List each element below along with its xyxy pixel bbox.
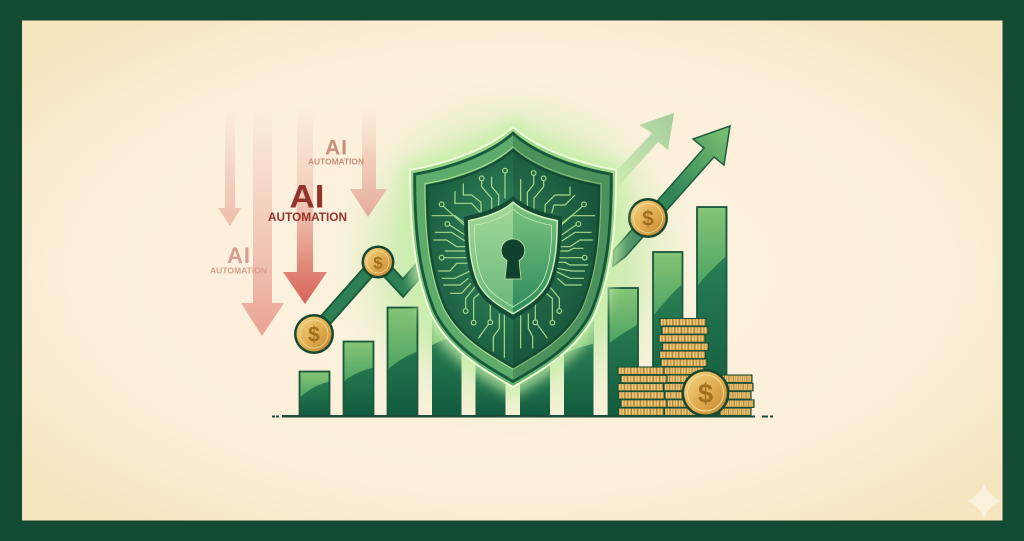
bar 3 bbox=[388, 308, 418, 416]
coin: right on arrow bbox=[628, 198, 668, 238]
arrow: right bbox=[350, 108, 387, 217]
inner shield body bbox=[469, 202, 557, 314]
circuit traces bbox=[432, 168, 595, 358]
coin stacks bbox=[618, 318, 754, 416]
shield field bbox=[427, 150, 599, 367]
shield halo bbox=[410, 127, 616, 387]
traces: left and top bbox=[432, 168, 507, 358]
coin: left low bbox=[294, 314, 334, 354]
coin: large front: $ bbox=[698, 378, 713, 408]
coin: left high bbox=[362, 246, 394, 278]
label: AI automation left bbox=[210, 243, 267, 276]
arrow: long left bbox=[241, 108, 284, 336]
bar 4 bbox=[432, 310, 462, 416]
bar 10 bbox=[697, 207, 726, 416]
inner shield right half bbox=[513, 204, 556, 312]
coin: left high: $ bbox=[373, 254, 383, 272]
shield right shade bbox=[513, 135, 610, 380]
arrow: small far left bbox=[218, 108, 241, 226]
bar 1 bbox=[300, 372, 330, 416]
bar 6 bbox=[520, 350, 550, 416]
bar 5 bbox=[476, 350, 506, 416]
bar 7 bbox=[564, 320, 594, 416]
coin: large front bbox=[682, 369, 730, 417]
label: AI automation left: AUTOMATION bbox=[210, 266, 267, 276]
main up arrow bbox=[613, 126, 730, 266]
label: AI automation top right bbox=[308, 136, 364, 166]
label: AI automation dark centre: AI bbox=[290, 178, 324, 214]
label: AI automation left: AI bbox=[227, 243, 250, 268]
inner shield line bbox=[474, 209, 552, 307]
inner shield outline bbox=[464, 196, 562, 320]
label: AI automation dark centre bbox=[268, 178, 347, 224]
traces: right and bottom bbox=[521, 171, 595, 348]
faded up arrow bbox=[617, 113, 674, 187]
stack: middle bbox=[659, 318, 708, 416]
arrow: dark centre bbox=[283, 108, 327, 304]
label: AI automation dark centre: AUTOMATION bbox=[268, 212, 347, 224]
stack: left bbox=[618, 367, 667, 416]
bar 2 bbox=[344, 342, 374, 416]
bar 9 bbox=[653, 252, 682, 416]
coin: left low: $ bbox=[308, 324, 320, 346]
trend line left bbox=[314, 261, 426, 333]
bar 8 bbox=[608, 288, 638, 416]
bar chart bbox=[300, 207, 726, 416]
keyhole bbox=[501, 239, 525, 279]
baseline bbox=[272, 415, 773, 418]
shield bbox=[410, 127, 616, 387]
label: AI automation top right: AUTOMATION bbox=[308, 156, 364, 166]
shield inner light line bbox=[425, 147, 601, 369]
shield rim bbox=[410, 127, 616, 387]
shield dark line bbox=[415, 133, 611, 382]
coin: right on arrow: $ bbox=[642, 208, 654, 230]
label: AI automation top right: AI bbox=[325, 136, 347, 160]
shield glow bbox=[328, 78, 698, 438]
inner shield bbox=[464, 196, 562, 320]
sparkle watermark bbox=[967, 484, 1001, 518]
stack: right bbox=[720, 375, 754, 416]
downward arrows bbox=[218, 108, 387, 336]
